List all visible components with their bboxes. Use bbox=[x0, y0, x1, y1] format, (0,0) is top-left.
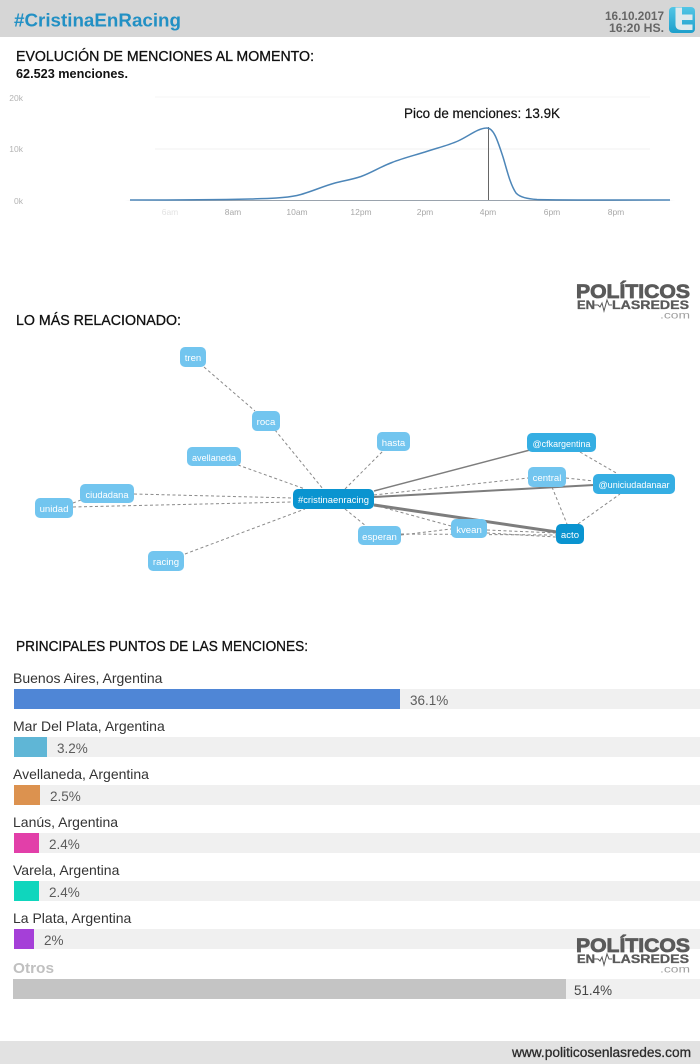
logo: politicos en las redes: LASREDES bbox=[612, 298, 689, 312]
bar: Mar Del Plata bbox=[13, 718, 700, 757]
bar: La Plata bbox=[13, 910, 700, 949]
title: #CristinaEnRacing bbox=[14, 10, 181, 30]
bar: Mar Del Plata: Mar Del Plata, Argentina bbox=[13, 718, 165, 734]
footer bar bbox=[0, 1041, 700, 1064]
node: #cristinaenracing: #cristinaenracing bbox=[298, 495, 369, 506]
peak marker line bbox=[488, 127, 490, 200]
bar: La Plata: 2% bbox=[44, 933, 64, 948]
x axis labels: 8pm bbox=[608, 207, 624, 217]
heading: most related: LO MÁS RELACIONADO: bbox=[16, 312, 181, 329]
peak label: Pico de menciones: 13.9K bbox=[404, 106, 560, 121]
y axis labels: 0k bbox=[14, 196, 24, 206]
node: unidad bbox=[35, 498, 73, 518]
node: hasta: hasta bbox=[382, 438, 406, 449]
node: central: central bbox=[533, 473, 561, 484]
node: acto bbox=[556, 524, 584, 544]
bar: Lanús bbox=[13, 814, 700, 853]
date and time: 16:20 HS. bbox=[609, 21, 664, 35]
node: @uniciudadanaar bbox=[593, 474, 675, 494]
bar: Avellaneda: Avellaneda, Argentina bbox=[13, 766, 149, 782]
logo: politicos en las redes, lower: LASREDES bbox=[612, 952, 689, 966]
x axis labels: 12pm bbox=[350, 207, 372, 217]
node: tren bbox=[180, 347, 206, 367]
logo: politicos en las redes, lower: .com bbox=[660, 964, 690, 976]
date and time bbox=[605, 9, 664, 35]
node: racing: racing bbox=[153, 557, 179, 568]
node: roca: roca bbox=[257, 417, 276, 428]
network graph bbox=[35, 347, 675, 571]
node: kvean: kvean bbox=[456, 525, 482, 536]
logo: politicos en las redes: .com bbox=[660, 310, 690, 322]
node: hasta bbox=[377, 432, 410, 451]
bar: Varela bbox=[13, 862, 700, 901]
y axis labels: 10k bbox=[9, 144, 24, 154]
bar: Otros bbox=[13, 960, 700, 999]
solid links bbox=[374, 450, 594, 532]
node: roca bbox=[252, 411, 280, 431]
node: racing bbox=[148, 551, 184, 571]
node: kvean bbox=[451, 519, 487, 538]
x axis labels: 6am bbox=[162, 207, 178, 217]
y axis labels: 20k bbox=[9, 93, 24, 103]
node: acto: acto bbox=[561, 530, 579, 541]
heading: evolution of mentions bbox=[16, 48, 314, 81]
bar: Mar Del Plata: 3.2% bbox=[57, 741, 88, 756]
bar: Buenos Aires: 36.1% bbox=[410, 693, 448, 708]
node: avellaneda: avellaneda bbox=[192, 453, 237, 464]
logo: politicos en las redes, lower: POLÍTICOS bbox=[576, 935, 690, 957]
bar: La Plata: La Plata, Argentina bbox=[13, 910, 132, 926]
mention total: 62.523 menciones. bbox=[16, 66, 128, 81]
logo: politicos en las redes: EN bbox=[577, 298, 595, 312]
node: @cfkargentina bbox=[527, 433, 596, 452]
bar chart: locations bbox=[13, 670, 700, 999]
node: unidad: unidad bbox=[40, 504, 68, 515]
y axis labels bbox=[9, 93, 24, 206]
bar: Otros: Otros bbox=[13, 960, 54, 977]
heading: main mention locations: PRINCIPALES PUNTOS DE LAS MENCIONES: bbox=[16, 639, 308, 655]
mentions curve bbox=[130, 128, 670, 200]
bar: Buenos Aires bbox=[13, 670, 700, 709]
heading: evolution of mentions: EVOLUCIÓN DE MENCIONES AL MOMENTO: bbox=[16, 48, 314, 65]
bar: Varela: 2.4% bbox=[49, 885, 80, 900]
node: tren: tren bbox=[185, 353, 201, 364]
x axis labels: 4pm bbox=[480, 207, 496, 217]
node: @uniciudadanaar: @uniciudadanaar bbox=[598, 480, 670, 491]
node: central bbox=[528, 467, 566, 487]
node: #cristinaenracing bbox=[293, 489, 374, 509]
x axis labels: 8am bbox=[225, 207, 241, 217]
node: esperan: esperan bbox=[362, 532, 397, 543]
bar: Varela: Varela, Argentina bbox=[13, 862, 120, 878]
website url: www.politicosenlasredes.com bbox=[511, 1045, 691, 1060]
nodes bbox=[35, 347, 675, 571]
logo: politicos en las redes, lower: EN bbox=[577, 952, 595, 966]
x axis labels: 10am bbox=[286, 207, 308, 217]
icon: twitter bbox=[669, 7, 695, 33]
x axis labels: 6pm bbox=[544, 207, 560, 217]
bar: Lanús: 2.4% bbox=[49, 837, 80, 852]
logo: politicos en las redes, lower bbox=[576, 935, 690, 976]
date and time: 16.10.2017 bbox=[605, 9, 664, 23]
header bar bbox=[0, 0, 700, 37]
dashed links bbox=[73, 367, 620, 554]
x axis labels: 2pm bbox=[417, 207, 433, 217]
logo: politicos en las redes: POLÍTICOS bbox=[576, 281, 690, 303]
node: esperan bbox=[358, 526, 401, 545]
line chart: mentions over time bbox=[9, 93, 675, 217]
logo: politicos en las redes bbox=[576, 281, 690, 322]
node: avellaneda bbox=[187, 447, 241, 466]
x axis labels bbox=[162, 207, 624, 217]
node: ciudadana bbox=[80, 484, 134, 503]
node: ciudadana: ciudadana bbox=[86, 490, 129, 501]
bar: Avellaneda bbox=[13, 766, 700, 805]
bar: Avellaneda: 2.5% bbox=[50, 789, 81, 804]
node: @cfkargentina: @cfkargentina bbox=[532, 439, 591, 450]
bar: Lanús: Lanús, Argentina bbox=[13, 814, 118, 830]
bar: Buenos Aires: Buenos Aires, Argentina bbox=[13, 670, 163, 686]
bar: Otros: 51.4% bbox=[574, 982, 612, 998]
